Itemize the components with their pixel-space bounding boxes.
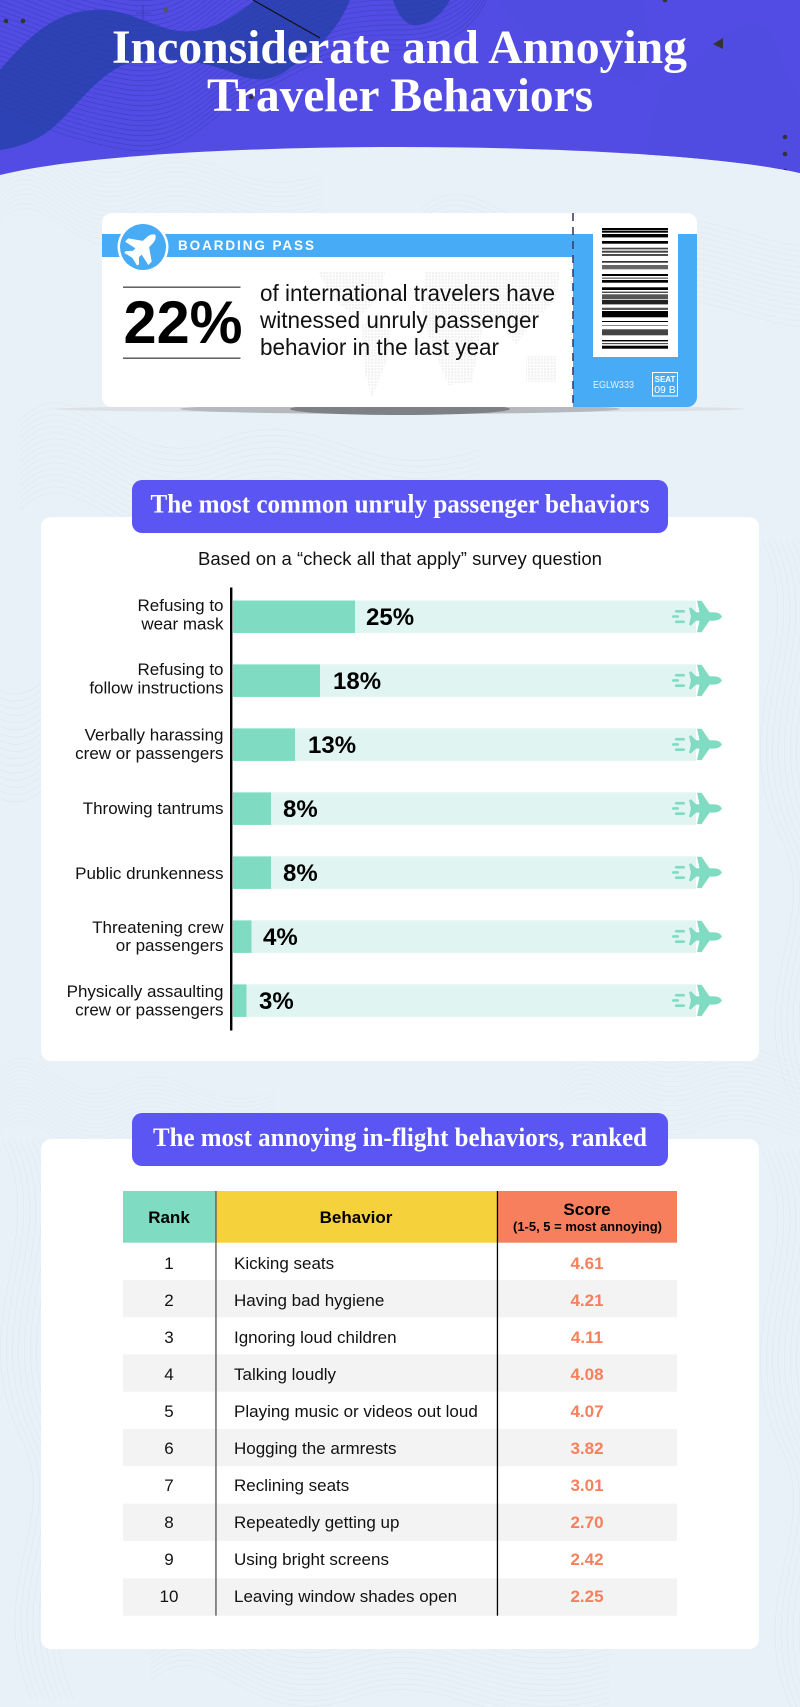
bar: harassing: 13% <box>308 732 356 759</box>
ticket shadow <box>55 403 745 415</box>
flight code: EGLW333 <box>593 379 634 391</box>
statistic description <box>259 280 555 360</box>
bar: tantrums: Throwing tantrums <box>83 799 224 818</box>
bar: harassing: crew or passengers <box>75 744 224 763</box>
decorative dots and triangle <box>4 0 787 173</box>
chart axis <box>230 588 232 1030</box>
bar: assaulting: crew or passengers <box>75 1000 224 1020</box>
stub <box>573 234 697 407</box>
faint mountain shapes at right of header <box>646 154 800 173</box>
boarding pass ticket <box>55 213 745 415</box>
bar: tantrums <box>83 792 722 825</box>
dark wave blob <box>0 0 450 150</box>
behavior column: Hogging the armrests <box>234 1439 397 1458</box>
score column: 4.08 <box>570 1365 604 1384</box>
table header: Rank <box>148 1208 190 1227</box>
heading pill <box>132 1113 668 1166</box>
score column <box>570 1254 604 1606</box>
heading pill <box>132 480 668 533</box>
rank column: 1 <box>164 1254 174 1273</box>
rank column: 5 <box>164 1402 174 1421</box>
bar: refusing mask <box>138 596 722 634</box>
rank column: 8 <box>164 1513 174 1532</box>
behavior column <box>234 1254 478 1606</box>
bar: harassing <box>75 726 722 763</box>
seat box <box>652 372 678 396</box>
bar: refusing instructions: follow instructions <box>89 678 224 698</box>
behavior column: Leaving window shades open <box>234 1587 457 1606</box>
seat box: SEAT <box>655 375 675 384</box>
rank column: 3 <box>164 1328 174 1347</box>
rank column: 6 <box>164 1439 174 1458</box>
behavior column: Repeatedly getting up <box>234 1513 399 1532</box>
behavior column: Ignoring loud children <box>234 1328 397 1347</box>
bar: threatening <box>92 918 722 955</box>
bar: refusing mask: 25% <box>366 604 414 631</box>
heading pill: The most annoying in-flight behaviors, ranked <box>153 1123 648 1152</box>
bar: harassing: Verbally harassing <box>85 726 224 744</box>
score column: 2.25 <box>570 1587 604 1606</box>
statistic description: behavior in the last year <box>260 334 499 360</box>
bar: threatening: or passengers <box>116 936 224 955</box>
behavior column: Playing music or videos out loud <box>234 1402 478 1421</box>
panel: most annoying behaviors <box>41 1113 759 1649</box>
bar: threatening: 4% <box>263 924 298 951</box>
table header <box>123 1191 677 1243</box>
heading pill: The most common unruly passenger behaviors <box>150 490 650 518</box>
rank column <box>160 1254 178 1606</box>
subtitle: Based on a “check all that apply” survey question <box>198 549 602 569</box>
rank column: 9 <box>164 1550 174 1569</box>
score column: 3.01 <box>570 1476 604 1495</box>
header band <box>0 0 800 180</box>
score column: 2.42 <box>570 1550 604 1569</box>
panel: most common behaviors <box>41 480 759 1061</box>
bar: refusing mask: wear mask <box>140 614 224 634</box>
score column: 3.82 <box>570 1439 604 1458</box>
score column: 2.70 <box>570 1513 604 1532</box>
bar: refusing instructions <box>89 660 722 698</box>
rank column: 4 <box>164 1365 174 1384</box>
title: Inconsiderate and Annoying <box>112 21 687 74</box>
bar: refusing instructions: Refusing to <box>138 660 224 679</box>
rank column: 2 <box>164 1291 174 1310</box>
bar: refusing instructions: 18% <box>333 668 381 695</box>
boarding pass label: BOARDING PASS <box>178 238 314 253</box>
title: Traveler Behaviors <box>207 69 593 122</box>
behavior column: Using bright screens <box>234 1550 389 1569</box>
bar chart <box>67 588 722 1030</box>
score column: 4.11 <box>571 1328 603 1347</box>
statistic description: witnessed unruly passenger <box>259 307 539 333</box>
behavior column: Kicking seats <box>234 1254 334 1273</box>
bar: assaulting: Physically assaulting <box>67 982 224 1001</box>
barcode box <box>593 213 678 357</box>
statistic description: of international travelers have <box>260 280 555 306</box>
bar: drunkenness: 8% <box>283 860 318 887</box>
bar: drunkenness <box>75 856 722 889</box>
alternating row fills <box>123 1280 677 1616</box>
behavior column: Reclining seats <box>234 1476 349 1495</box>
ticket body <box>102 213 697 407</box>
score column: 4.61 <box>570 1254 604 1273</box>
dashed tear line <box>572 213 574 407</box>
behavior column: Having bad hygiene <box>234 1291 384 1310</box>
bar: tantrums: 8% <box>283 796 318 823</box>
ranking table <box>123 1191 677 1616</box>
bar: assaulting <box>67 982 722 1020</box>
table header: Behavior <box>320 1208 393 1227</box>
bar: assaulting: 3% <box>259 988 294 1015</box>
rank column: 10 <box>160 1587 178 1606</box>
bar: threatening: Threatening crew <box>92 918 224 937</box>
column dividers <box>215 1191 217 1616</box>
plane badge <box>118 222 168 272</box>
blue band <box>102 234 573 257</box>
bar: refusing mask: Refusing to <box>138 596 224 615</box>
title <box>112 21 687 122</box>
behavior column: Talking loudly <box>234 1365 337 1384</box>
seat box: 09 B <box>654 384 676 396</box>
bar: drunkenness: Public drunkenness <box>75 864 224 883</box>
world map dots <box>318 272 560 398</box>
table header: (1-5, 5 = most annoying) <box>513 1220 662 1234</box>
table header: Score <box>563 1200 611 1219</box>
rank column: 7 <box>164 1476 174 1495</box>
score column: 4.07 <box>570 1402 604 1421</box>
statistic 22%: 22% <box>124 289 242 356</box>
score column: 4.21 <box>570 1291 604 1310</box>
